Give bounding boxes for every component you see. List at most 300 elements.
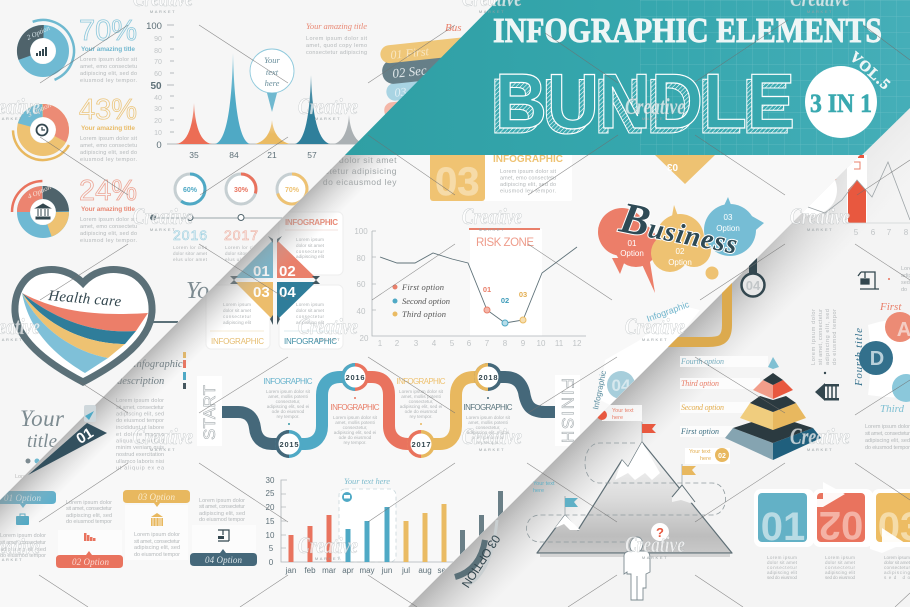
text: lorem behind banner: do eicausmod ley — [323, 177, 397, 187]
text: rotated lorem: sit amet, consectetur — [818, 309, 824, 365]
note 01 red — [597, 405, 642, 421]
text: lorem right — [888, 266, 910, 293]
pyramid level labels: Fourth option — [680, 357, 724, 366]
text: 43 percent: Lorem ipsum dolor sit — [80, 136, 137, 142]
watermark: Creative Market marks: Creative — [462, 424, 522, 449]
text: tile caption 3: sed do — [884, 575, 910, 580]
timeline text 2015: ode do eiusmod — [272, 409, 305, 414]
path: yellow road with 04 marker — [668, 258, 764, 342]
panel: option 03: adipiscing elit, sed — [134, 545, 180, 551]
timeline: years strip: Lorem lor cilis — [173, 245, 208, 250]
arrow: tile 1 to 2 — [810, 482, 845, 507]
donut: 70 percent: 2 Option — [25, 24, 52, 42]
timeline text 2018: amet, mollis potenti — [468, 420, 508, 425]
text: tile caption 2 — [825, 555, 856, 580]
chart: monthly bars: mar — [322, 566, 336, 575]
timeline text 2015: INFOGRAPHIC — [264, 377, 313, 386]
panel: option 03: Lorem ipsum dolor — [134, 532, 180, 538]
chart: risk zone line chart: 80 — [357, 254, 366, 263]
petal graphic: A D F: D — [870, 348, 884, 370]
panel: option 01: adipiscing elit, sed — [0, 547, 46, 553]
timeline text 2015: Lorem ipsum dolor sit — [266, 389, 311, 394]
timeline text 2018: ode do eiusmod — [472, 435, 505, 440]
timeline: years strip: dolor sitor amet — [173, 251, 208, 256]
panel: option 04: sit amet, consectetur — [199, 504, 245, 510]
chart legend: Second option — [402, 296, 450, 306]
chart: monthly bars: sep — [438, 566, 451, 575]
panel: option 01: 01 Option — [4, 493, 42, 503]
chart: peak area chart: 100 — [146, 21, 162, 32]
panel: option 04 — [190, 498, 257, 566]
text: fourth and third titles: Lorem ipsum dolor — [865, 424, 910, 430]
banner: title block — [345, 0, 910, 155]
chart: peak area chart: 21 — [267, 150, 277, 160]
text: 24 percent: 24% — [79, 175, 137, 207]
text: your amazing title right: Your amazing title — [306, 21, 367, 31]
diamond: four quadrants 01-04: 01 — [253, 263, 270, 280]
timeline text 2017 — [396, 377, 446, 425]
panel: right sheet — [408, 105, 910, 607]
watermark: Creative Market marks: MARKET — [807, 9, 833, 14]
pyramid level labels — [680, 356, 768, 437]
watermark: Creative Market marks: MARKET — [642, 555, 668, 560]
year node 2017 — [407, 430, 435, 458]
chart: risk zone line chart: 12 — [573, 339, 582, 348]
progress rings — [175, 174, 307, 204]
note 03 teal — [533, 481, 555, 494]
text: tile caption 2: sed do eiusmod — [825, 575, 855, 580]
text: 70 percent — [79, 15, 137, 84]
text: lorem behind banner: dolor sit amet — [339, 155, 397, 165]
watermark: Creative Market marks: MARKET — [642, 337, 668, 342]
text: lorem behind banner: ctetur adipisicing — [325, 166, 397, 176]
chart: risk zone line chart: 40 — [357, 307, 366, 316]
chart: risk zone line chart: 100 — [354, 227, 368, 236]
chart: monthly bars: 30 — [266, 476, 275, 485]
text: infographic description: incididunt ut labore — [116, 425, 164, 431]
cards: numbered tiles — [754, 482, 910, 580]
card: bottom right infographic: consectetur — [296, 314, 324, 319]
text: tile caption 1: consectetur — [767, 565, 797, 570]
pyramid level labels: Third option — [681, 379, 719, 388]
text: tile caption 1 — [767, 555, 798, 580]
panel: option 01 — [0, 491, 56, 559]
icon: colour pencil strip — [183, 352, 186, 389]
timeline text 2017: amet, mollis potenti — [401, 394, 441, 399]
callout: your text here bubble: Your — [264, 55, 281, 65]
text: 70 percent: eiusmod ley tempor. — [80, 78, 137, 84]
chart: risk zone line chart: 5 — [450, 339, 455, 348]
chart: right line and red bar: 5 — [854, 228, 859, 237]
heart: health care: Health care — [47, 288, 122, 310]
text: tile caption 3: consectetur — [884, 565, 910, 570]
pyramid level labels: Second option — [681, 403, 724, 412]
watermark: Creative Market marks: MARKET — [315, 556, 341, 561]
timeline text 2016: amet, mollis potenti — [335, 420, 375, 425]
text: your title — [15, 406, 65, 480]
callout: your text here bubble: text — [266, 67, 279, 77]
timeline: years strip — [150, 214, 290, 304]
text: infographic description: do eiusmod tempor — [116, 418, 164, 424]
ring 70 percent: 70% — [285, 187, 300, 194]
shape: 01 pointer: 01 — [73, 424, 97, 448]
card: 03 infographic: eiusmod ley tempor. — [500, 188, 556, 194]
chart: monthly bars: 0 — [269, 558, 274, 567]
timeline text 2017: INFOGRAPHIC — [396, 377, 446, 386]
chart: peak area chart: 40 — [154, 95, 162, 102]
chart: peak area chart: 57 — [307, 150, 317, 160]
petal graphic: A D F — [859, 312, 910, 402]
text: tile caption 2: dolor sit amet — [825, 560, 856, 565]
text: rotated lorem: Lorem ipsum dolor — [811, 309, 817, 365]
timeline: years strip: dolor sitor amet — [225, 251, 260, 256]
chart legend — [392, 282, 450, 319]
text: infographic description — [116, 359, 183, 472]
year node 2016 — [341, 363, 369, 391]
pills: option list — [378, 22, 482, 120]
panel: upper-left sheet content — [2, 10, 482, 480]
watermark: Creative Market marks: MARKET — [479, 447, 505, 452]
timeline: years strip: elus ulor amet — [173, 257, 208, 262]
panel: option 04: 04 Option — [205, 555, 242, 565]
card: top infographic — [279, 212, 343, 275]
text: infographic description: aliqua ut enim ad — [116, 438, 164, 444]
chart: risk zone line chart: 20 — [360, 334, 369, 343]
panel: option 04: do eiusmod tempor — [199, 517, 245, 523]
pyramid — [680, 356, 821, 460]
year node 2018 — [474, 363, 502, 391]
timeline text 2018 — [464, 397, 513, 445]
panel: upper-left sheet — [0, 0, 500, 500]
diamond: four quadrants 01-04 — [230, 236, 320, 325]
text: your title: Lorem — [15, 474, 31, 480]
chart: risk zone line chart: 2 — [395, 339, 400, 348]
timeline text 2016 — [330, 397, 380, 445]
chart: monthly bars: jun — [381, 566, 392, 575]
title: bundle: BUNDLE — [495, 57, 795, 145]
text: vol 5: VOL.5 — [846, 49, 893, 93]
panel: option 04: adipiscing elit, sed — [199, 511, 245, 517]
watermark: Creative Market marks: Creative — [298, 94, 358, 119]
panel: centre sheet content — [0, 150, 764, 575]
timeline text 2018: consectetur, — [476, 425, 500, 430]
text: your amazing title right: Lorem ipsum dolor sit — [306, 36, 367, 42]
pills: option list: Bus — [445, 22, 462, 34]
chart: risk zone line chart: 7 — [485, 339, 490, 348]
text: infographic description: Infographic — [132, 359, 183, 370]
text: 43 percent: 43% — [79, 94, 137, 126]
blob: business splash: 01 — [628, 239, 637, 248]
chart: peak area chart: 80 — [154, 48, 162, 55]
timeline text 2018: rey tempor. — [477, 440, 499, 445]
shape: 01 pointer — [28, 405, 107, 475]
watermark: Creative Market marks: Creative — [625, 532, 685, 557]
blob: business splash: 03 — [724, 213, 733, 222]
text: rotated lorem: adipiscing elit, sed — [825, 309, 831, 365]
card: bottom left infographic: Lorem ipsum — [223, 302, 251, 307]
timeline text 2015: adipiscing elit, sed ei — [267, 404, 309, 409]
text: your title: Your — [20, 406, 65, 431]
timeline: years strip: elus ulor amet — [225, 257, 260, 262]
donut: 24 percent — [12, 181, 74, 243]
panel: option 02: Lorem ipsum dolor — [66, 500, 112, 506]
chart: monthly bars: jan — [285, 566, 296, 575]
watermark: Creative Market marks: MARKET — [642, 116, 668, 121]
watermark: Creative Market marks: Creative — [625, 314, 685, 339]
watermark: Creative Market marks: MARKET — [150, 227, 176, 232]
panel: option 01: Lorem ipsum dolor — [0, 533, 46, 539]
chart: peak area chart: 30 — [154, 106, 162, 113]
chart: monthly bars: jul — [401, 566, 410, 575]
card: top infographic: Lorem ipsum — [296, 237, 324, 242]
text: 43 percent: adipiscing elit, sed do — [80, 150, 137, 156]
year node 2015: 2015 — [280, 440, 298, 449]
timeline text 2016: consectetur, — [343, 425, 367, 430]
card: bottom right infographic — [279, 285, 343, 349]
card: 03 infographic: adipiscing elit, sed do — [500, 182, 556, 188]
chart: risk zone line chart: 10 — [537, 339, 546, 348]
chart legend: Third option — [402, 309, 446, 319]
chart: risk zone line chart: 3 — [414, 339, 419, 348]
diamond: four quadrants 01-04: 03 — [253, 284, 270, 301]
watermark: Creative Market marks: MARKET — [315, 116, 341, 121]
chart: risk zone line chart: 03 — [519, 290, 527, 299]
text: fourth and third titles: Third — [880, 403, 905, 415]
badge: infographic arc 04 — [592, 302, 690, 410]
shadow gradient cast by centre sheet — [408, 105, 910, 607]
dashed route — [526, 443, 726, 542]
donut: 24 percent: 4 Option — [26, 183, 53, 201]
callout: your text here bubble: here — [265, 78, 280, 88]
text: infographic description: ullamco laboris nisi — [116, 459, 164, 465]
text: tile caption 3: Lorem ipsum — [884, 555, 910, 560]
card: 03 infographic: 03 — [435, 160, 480, 204]
text: infographic description: sit amet, consectetur — [116, 405, 164, 411]
card: bottom right infographic: INFOGRAPHIC — [284, 337, 337, 346]
watermark: Creative Market marks: Creative — [790, 424, 850, 449]
chart: right line and red bar — [808, 155, 910, 237]
watermark: Creative Market marks: MARKET — [479, 227, 505, 232]
note 02 yellow: here — [700, 456, 711, 462]
figure: person with question — [624, 523, 669, 600]
text: tile caption 2: adipiscing elit — [825, 570, 856, 575]
text: rotated lorem — [811, 309, 838, 365]
chart: peak area chart — [146, 21, 370, 160]
text: infographic description: adipiscing elit, sed — [116, 412, 164, 418]
text: 70 percent: Your amazing title — [81, 46, 135, 53]
text: 24 percent: eiusmod ley tempor. — [80, 238, 137, 244]
chart legend: First option — [401, 282, 444, 292]
ring: 47 percent — [802, 179, 837, 215]
card: bottom left infographic: INFOGRAPHIC — [211, 337, 264, 346]
cards: numbered tiles: 02 — [819, 503, 863, 547]
watermark: Creative Market marks: MARKET — [479, 9, 505, 14]
card: 03 infographic: amet, emo consectetu — [500, 176, 556, 182]
chart: monthly bars: 20 — [266, 503, 275, 512]
card: bottom right infographic: adipiscing elit — [296, 320, 325, 325]
chart: risk zone line chart — [354, 227, 586, 348]
start tab — [203, 385, 216, 440]
timeline text 2016: Lorem ipsum dolor sit — [333, 415, 378, 420]
chart: peak area chart: 90 — [154, 36, 162, 43]
text: tile caption 1: adipiscing elit — [767, 570, 798, 575]
chart: peak area chart: 20 — [154, 118, 162, 125]
donut: 43 percent — [2, 89, 84, 171]
chart: peak area chart: 0 — [156, 140, 162, 151]
text: rotated lorem: do eiusmod tempor — [832, 309, 838, 365]
text: infographic description: description — [117, 376, 164, 387]
chart: monthly bars: apr — [342, 566, 354, 575]
note 02 yellow: Your text — [689, 449, 711, 455]
panel: option 03: do eiusmod tempor — [134, 552, 180, 558]
text: lorem right: do — [901, 287, 907, 293]
text: 43 percent: Your amazing title — [81, 125, 135, 132]
icon: bank — [815, 372, 839, 401]
panel: option 02: sit amet, consectetur — [66, 506, 112, 512]
timeline text 2016: adipiscing elit, sed ei — [334, 430, 376, 435]
text: 70 percent: adipiscing elit, sed do — [80, 71, 137, 77]
risk zone highlight — [469, 228, 540, 246]
callout: your text here bubble — [250, 49, 294, 112]
chart: right line and red bar: 7 — [887, 228, 892, 237]
figure: person with question: ? — [656, 525, 664, 540]
panel: option 02 — [56, 500, 123, 568]
note 02 yellow — [685, 448, 730, 464]
timeline: years strip: 2016 — [173, 227, 207, 243]
blob: business splash: Option — [620, 249, 644, 258]
diamond: 03 tab — [655, 155, 715, 184]
chart: risk zone line chart: 60 — [357, 280, 366, 289]
year node 2015 — [275, 430, 303, 458]
text: fourth and third titles: Fourth title — [853, 328, 865, 387]
text: tile caption 3: dolor sit amet — [884, 560, 910, 565]
timeline text 2016: INFOGRAPHIC — [330, 403, 380, 412]
chart: peak area chart: 50 — [150, 81, 162, 92]
chart: monthly bars: feb — [304, 566, 316, 575]
text: 24 percent: adipiscing elit, sed do — [80, 231, 137, 237]
diamond: four quadrants 01-04: 04 — [279, 284, 296, 301]
heart: health care — [15, 270, 178, 382]
text: tile caption 1: dolor sit amet — [767, 560, 798, 565]
text: tile caption 1: sed do eiusmod — [767, 575, 797, 580]
panel: option 03: sit amet, consectetur — [134, 539, 180, 545]
card: top infographic: consectetur — [296, 249, 324, 254]
timeline text 2017: ode do eiusmod — [405, 409, 438, 414]
card: bottom left infographic: dolor sit amet — [223, 308, 252, 313]
timeline: start to finish road — [197, 363, 580, 458]
year node 2016: 2016 — [346, 373, 364, 382]
text: 43 percent: amet, emo consectetu — [80, 143, 137, 149]
panel: option 02: 02 Option — [72, 557, 110, 567]
text: fourth and third titles — [853, 301, 910, 451]
chart: risk zone line chart: 8 — [503, 339, 508, 348]
chart: monthly bars: may — [359, 566, 375, 575]
watermark: Creative Market marks: MARKET — [807, 447, 833, 452]
timeline: years strip: 2017 — [224, 227, 258, 243]
text: 70 percent: Lorem ipsum dolor sit — [80, 57, 137, 63]
title: bundle: BUNDLE — [490, 62, 790, 150]
watermark: Creative Market marks: Creative — [133, 204, 193, 229]
card: bottom left infographic — [206, 302, 270, 350]
badge: 3 in 1: 3 IN 1 — [810, 89, 872, 118]
chart: monthly bars: 25 — [266, 489, 275, 498]
badge: infographic arc 04: Infographic — [645, 299, 691, 324]
chart: risk zone line chart: 11 — [555, 339, 564, 348]
pills: option list: 01 First — [390, 44, 430, 62]
card: bottom right infographic: dolor sit amet — [296, 308, 325, 313]
timeline text 2017: Lorem ipsum dolor sit — [399, 389, 444, 394]
year node 2018: 2018 — [478, 373, 498, 382]
mountain with flags — [526, 405, 732, 557]
note 01 red: here — [612, 415, 623, 421]
note 02 yellow: 02 — [718, 453, 726, 460]
card: bottom left infographic: adipiscing elit — [223, 320, 252, 325]
text: tile caption 2: Lorem ipsum — [825, 555, 855, 560]
chart: monthly bars: 15 — [266, 517, 275, 526]
ring 30 percent: 30% — [234, 187, 249, 194]
timeline text 2017: rey tempor. — [410, 414, 432, 419]
note 03 teal: Your text — [533, 481, 555, 487]
text: your amazing title right: amet, quod copy lemo — [306, 43, 367, 49]
text: infographic description: nostrud exercitation — [116, 452, 164, 458]
flag red — [642, 422, 656, 442]
card: 03 infographic — [430, 155, 563, 201]
donut: 70 percent — [2, 10, 84, 92]
watermark: Creative Market marks: MARKET — [150, 447, 176, 452]
finish tab: FINISH — [558, 378, 577, 443]
text: 24 percent — [79, 175, 137, 244]
pills: option list: 02 Sec — [392, 62, 428, 81]
text: your title: title — [27, 431, 57, 452]
timeline text 2018: Lorem ipsum dolor sit — [466, 415, 511, 420]
text: infographic description: et dolore magna — [116, 432, 165, 438]
text: fourth and third titles: sit amet, consectetur — [865, 431, 910, 437]
blob: business splash: 02 — [676, 247, 685, 256]
path: yellow road with 04 marker: 04 — [746, 278, 761, 293]
text: your amazing title right: consectetur adipiscing — [306, 50, 367, 56]
chart: monthly bars: 10 — [266, 531, 275, 540]
flag yellow — [682, 464, 696, 485]
text: tile caption 3 — [884, 555, 910, 580]
watermark: Creative Market marks: MARKET — [807, 227, 833, 232]
chart: right line and red bar: 6 — [871, 228, 876, 237]
chart: peak area chart: 10 — [154, 130, 162, 137]
badge: infographic arc 04: 04 — [612, 376, 631, 395]
card: top infographic: adipiscing elit — [296, 254, 325, 259]
chart: risk zone line chart: 9 — [521, 339, 526, 348]
card: bottom right infographic: Lorem ipsum — [296, 302, 324, 307]
text: 24 percent: Your amazing title — [81, 206, 135, 213]
panel: option 02: do eiusmod tempor — [66, 519, 112, 525]
chart: risk zone line chart: 6 — [467, 339, 472, 348]
card: top infographic: INFOGRAPHIC — [285, 218, 338, 227]
text: 24 percent: Lorem ipsum dolor sit — [80, 217, 137, 223]
card: top infographic: dolor sit amet — [296, 243, 325, 248]
ring: 47 percent: 47% — [802, 185, 822, 196]
callout: your text here — [339, 476, 396, 562]
chart: risk zone line chart: 4 — [432, 339, 437, 348]
chart: peak area chart: 35 — [189, 150, 199, 160]
text: fourth and third titles: adipiscing elit, sed — [865, 438, 910, 444]
text: your amazing title right — [306, 21, 367, 56]
chart: peak area chart: 60 — [154, 71, 162, 78]
watermark: Creative Market marks: Creative — [625, 94, 685, 119]
text: fourth and third titles: do eiusmod tempor — [865, 445, 910, 451]
panel: option 01: do eiusmod tempor — [0, 553, 46, 559]
text: 43 percent: eiusmod ley tempor. — [80, 157, 137, 163]
panel: option 03 — [123, 490, 190, 560]
option 03 arc: 03 OPTION — [459, 532, 503, 590]
